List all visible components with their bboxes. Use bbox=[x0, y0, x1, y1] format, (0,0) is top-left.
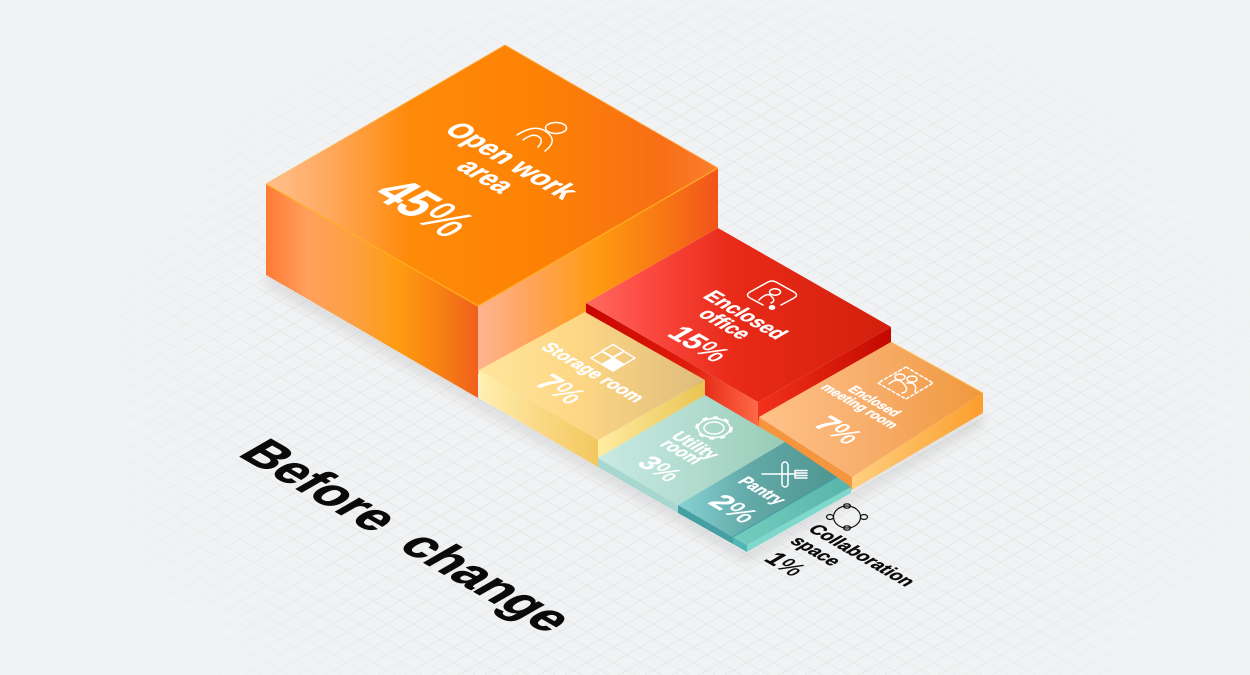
open work area label bbox=[361, 118, 585, 245]
enclosed office label: 15% bbox=[660, 322, 737, 367]
panel: collaboration space block bbox=[733, 477, 851, 552]
utility room label: Utility bbox=[666, 429, 724, 463]
panel: pantry block bbox=[678, 442, 837, 544]
enclosed office label: Enclosed bbox=[698, 287, 794, 343]
icon: fork and knife bbox=[762, 462, 807, 487]
panel: enclosed meeting room block bbox=[759, 342, 983, 490]
enclosed office label: office bbox=[693, 305, 758, 343]
collaboration space label: space bbox=[785, 533, 846, 569]
open work area label: Open work bbox=[437, 118, 585, 204]
icon: office person bbox=[748, 281, 796, 310]
enclosed meeting room label: 7% bbox=[806, 412, 869, 449]
collaboration space label: 1% bbox=[758, 549, 811, 580]
enclosed meeting room label: Enclosed bbox=[844, 384, 904, 419]
storage room label: 7% bbox=[527, 370, 594, 409]
floor shadow bbox=[266, 275, 983, 562]
pantry label bbox=[701, 474, 791, 527]
collaboration space label: Collaboration bbox=[803, 521, 920, 590]
icon: round table with chairs bbox=[826, 504, 868, 530]
storage room label: Storage room bbox=[536, 340, 649, 406]
open work area label: area bbox=[449, 155, 523, 198]
open work area label: 45% bbox=[361, 171, 488, 245]
enclosed office label bbox=[660, 287, 794, 367]
utility room label bbox=[631, 429, 724, 486]
pantry label: Pantry bbox=[734, 474, 791, 507]
enclosed meeting room label: meeting room bbox=[817, 382, 901, 431]
icon: person at desk bbox=[517, 122, 566, 151]
icon: meeting room bbox=[878, 367, 933, 399]
panel: utility room block bbox=[598, 395, 785, 513]
utility room label: 3% bbox=[631, 452, 689, 486]
title: Before change bbox=[227, 432, 587, 640]
panel: open work area block bbox=[266, 45, 718, 398]
icon: storage boxes bbox=[591, 344, 635, 371]
pantry label: 2% bbox=[701, 490, 765, 527]
enclosed meeting room label bbox=[806, 382, 904, 449]
collaboration space label bbox=[758, 521, 920, 590]
icon: gear bbox=[696, 418, 732, 438]
panel: storage room block bbox=[479, 312, 705, 467]
panel: enclosed office block bbox=[586, 228, 891, 442]
utility room label: room bbox=[655, 437, 707, 468]
